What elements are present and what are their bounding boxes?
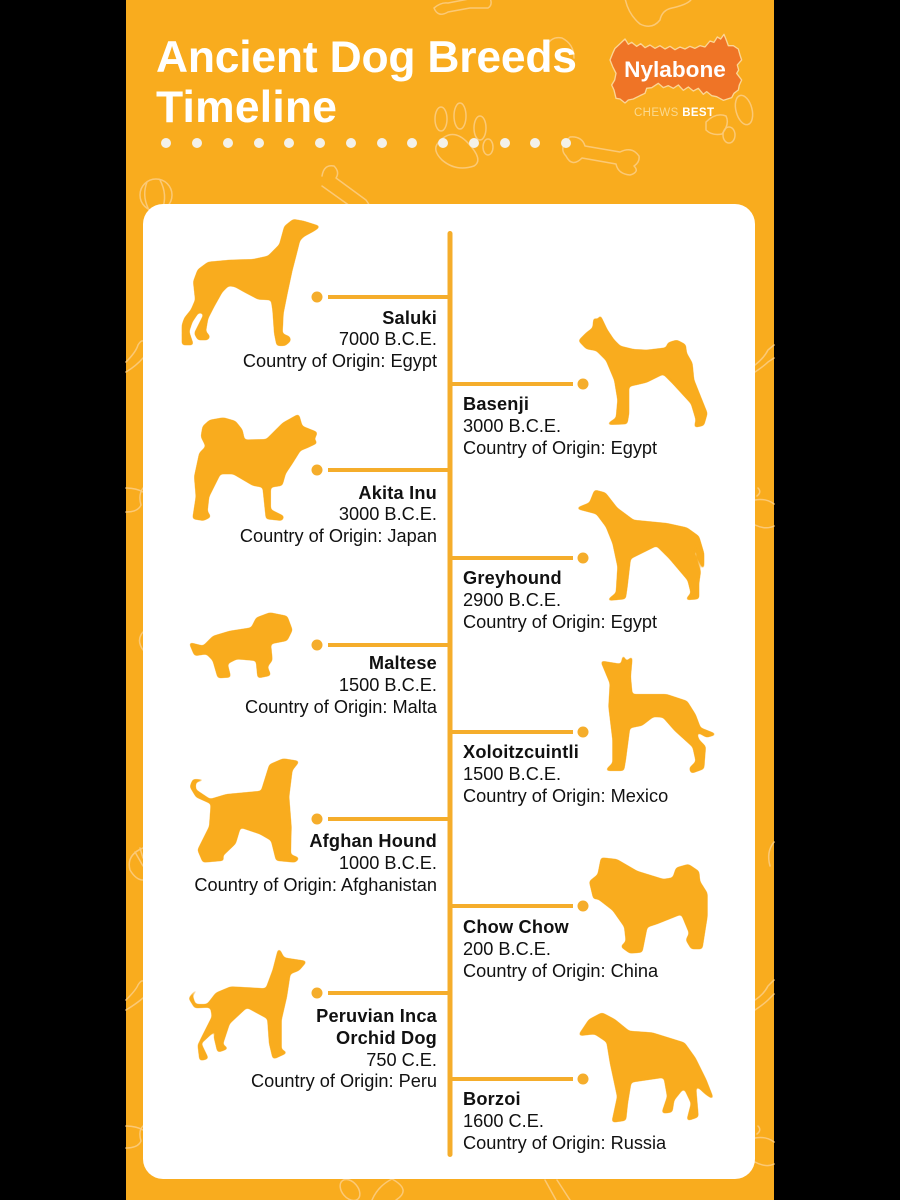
label: Saluki [382,308,437,328]
entry: Maltese [190,613,450,717]
logo: Nylabone [610,34,742,135]
connector [312,640,450,650]
white timeline card [143,204,755,1179]
label: Borzoi [463,1089,521,1109]
icon: xoloitzcuintli silhouette [602,656,715,773]
label: Country of Origin: Peru [251,1071,437,1091]
connector [312,292,450,302]
label: Country of Origin: Japan [240,526,437,546]
label: Peruvian Inca [316,1006,438,1026]
title: Ancient Dog Breeds [156,33,577,82]
orange background panel [126,0,774,1200]
dotted divider under title [161,138,571,148]
label: Akita Inu [358,483,437,503]
entry: Afghan Hound [191,759,450,895]
connector [312,814,450,824]
logo: Nylabone: Nylabone [624,57,726,82]
label: Greyhound [463,568,562,588]
label: 1600 C.E. [463,1111,544,1131]
label: Country of Origin: Egypt [463,438,657,458]
title: Timeline [156,83,337,132]
label: Country of Origin: Mexico [463,786,668,806]
entry: Saluki [183,220,450,371]
connector [450,900,588,912]
entry: Akita Inu [193,415,450,546]
icon: maltese silhouette [190,613,292,677]
icon: borzoi silhouette [579,1013,713,1122]
icon: afghan hound silhouette [191,759,298,862]
entry: Basenji [450,316,707,458]
entry: Greyhound [450,491,703,632]
label: Afghan Hound [309,831,437,851]
label: Country of Origin: Egypt [243,351,437,371]
connector [312,464,450,476]
label: Maltese [369,653,437,673]
label: 200 B.C.E. [463,939,551,959]
label: 2900 B.C.E. [463,590,561,610]
connector [312,988,450,998]
background pattern of bones, paws and balls [126,0,774,1200]
icon: peruvian inca orchid dog silhouette [190,949,306,1060]
icon: chow chow silhouette [590,858,707,953]
label: 3000 B.C.E. [463,416,561,436]
icon: greyhound silhouette [578,491,703,600]
connector [450,378,588,390]
logo: Nylabone: CHEWS BEST [634,107,714,119]
label: Chow Chow [463,917,570,937]
label: Country of Origin: Egypt [463,612,657,632]
label: 1000 B.C.E. [339,853,437,873]
label: Xoloitzcuintli [463,742,579,762]
label: 1500 B.C.E. [463,764,561,784]
label: Country of Origin: Russia [463,1133,667,1153]
label: Country of Origin: China [463,961,659,981]
label: Country of Origin: Malta [245,697,438,717]
label: 3000 B.C.E. [339,504,437,524]
entry: Xoloitzcuintli [450,656,715,806]
icon: saluki silhouette [183,220,319,345]
icon: akita silhouette [193,415,317,520]
label: 750 C.E. [366,1050,437,1070]
entry: Chow Chow [450,858,707,981]
label: 7000 B.C.E. [339,329,437,349]
connector [450,726,588,738]
entry: Borzoi [450,1013,713,1153]
paw outline behind logo text [706,115,727,134]
title [156,33,577,132]
connector [450,552,588,564]
entry: Peruvian Inca Orchid Dog [190,949,450,1091]
label: Country of Origin: Afghanistan [194,875,437,895]
icon: basenji silhouette [579,316,707,427]
label: Basenji [463,394,529,414]
timeline vertical axis [448,231,452,1157]
connector [450,1074,588,1084]
label: Orchid Dog [336,1028,437,1048]
label: 1500 B.C.E. [339,675,437,695]
